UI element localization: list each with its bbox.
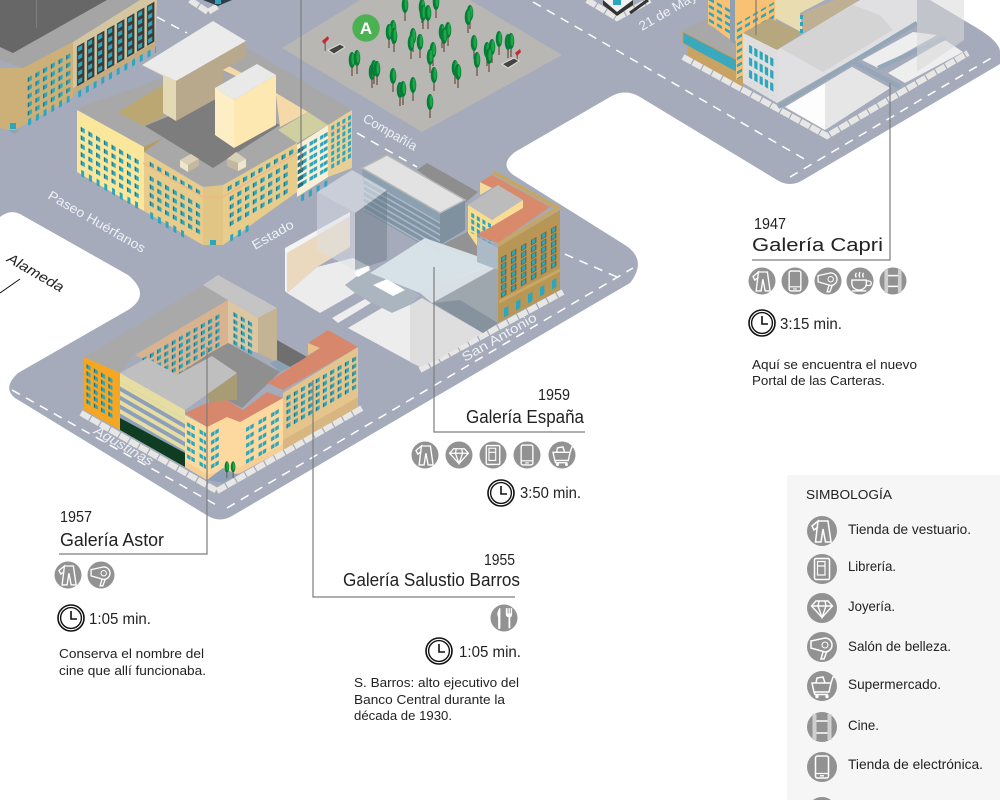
- translucent volume: [317, 170, 498, 333]
- trees: [349, 0, 514, 118]
- callout: Galería Astor: Galería Astor: [60, 529, 164, 550]
- callout: Galería Astor: Conserva el nombre del: [59, 646, 204, 661]
- building: Huérfanos block: [77, 21, 352, 245]
- metro marker A: [352, 14, 380, 42]
- beige windows: [800, 15, 803, 33]
- callout: Galería España: Galería España: [466, 406, 585, 427]
- callout: Galería Salustio Barros: Banco Central durante la: [354, 692, 506, 707]
- callout: Galería Astor: [54, 509, 206, 678]
- Alameda tick: [0, 279, 20, 293]
- building: Galería Astor block: [84, 275, 358, 483]
- callout: Galería Salustio Barros: [343, 552, 521, 723]
- panel: legend: Librería.: [848, 558, 896, 574]
- panel: legend: Cine.: [848, 717, 879, 733]
- road dashes: [12, 2, 993, 508]
- ground plan: [778, 23, 963, 130]
- panel: legend: Tienda de electrónica.: [848, 756, 983, 772]
- callout: Galería Capri: 3:15 min.: [780, 316, 842, 333]
- callout: Galería Capri: Aquí se encuentra el nuevo: [752, 357, 917, 372]
- street labels: Estado: [249, 217, 296, 253]
- corner plaza: [207, 468, 238, 483]
- street labels: San Antonio: [459, 310, 539, 365]
- brick corner building: [468, 172, 561, 323]
- tall block: [142, 21, 246, 121]
- legend heading: SIMBOLOGÍA: [806, 487, 892, 502]
- callout: Galería Capri: Portal de las Carteras.: [752, 373, 885, 388]
- sidewalks: [81, 0, 968, 491]
- panel: legend: Tienda de vestuario.: [848, 521, 971, 537]
- plaza with trees: [282, 0, 562, 132]
- callout: Galería Astor: 1957: [60, 509, 92, 526]
- grey office block: [362, 155, 465, 255]
- building top-left: [0, 0, 157, 134]
- callout: Galería Capri: 1947: [754, 216, 786, 233]
- building: Galería Capri block: [683, 0, 964, 130]
- building top-centre white: [603, 0, 633, 16]
- white-grey building: [743, 0, 917, 103]
- base plan: [285, 212, 483, 367]
- street labels: Compañía: [360, 111, 421, 154]
- street labels: [4, 0, 706, 469]
- callout: Galería Capri: [748, 216, 917, 388]
- metro marker A: A: [360, 19, 372, 38]
- street labels: Alameda: [4, 249, 67, 295]
- callout: Galería Salustio Barros: década de 1930.: [354, 708, 452, 723]
- callout: Galería Astor: 1:05 min.: [89, 611, 151, 628]
- yellow tower: [215, 64, 276, 148]
- metro entrance right: [502, 49, 521, 68]
- building small top centre: [203, 0, 232, 6]
- panel: legend: Salón de belleza.: [848, 638, 951, 654]
- callout: Galería Salustio Barros: 1:05 min.: [459, 644, 521, 661]
- panel: legend: Joyería.: [848, 598, 895, 614]
- rooftop units: [180, 152, 246, 172]
- callout: Galería España: 1959: [538, 387, 570, 404]
- panel: legend: [787, 475, 1000, 800]
- callout: Galería Salustio Barros: 1955: [484, 552, 515, 569]
- callout: Galería España: [412, 387, 585, 506]
- callout: Galería Salustio Barros: S. Barros: alto ejecutivo del: [354, 675, 519, 690]
- street labels: Agustinas: [90, 422, 157, 469]
- road network: [0, 0, 1000, 520]
- callout: Galería Salustio Barros: Galería Salustio Barros: [343, 569, 520, 590]
- panel: legend: Supermercado.: [848, 676, 941, 692]
- dark strip top: [630, 0, 648, 13]
- callout: Galería Capri: Galería Capri: [752, 234, 883, 255]
- metro entrance left: [322, 36, 345, 54]
- street labels: Paseo Huérfanos: [46, 188, 149, 256]
- leader lines: [36, 0, 890, 597]
- callout: Galería España: 3:50 min.: [520, 485, 581, 502]
- callout: Galería Astor: cine que allí funcionaba.: [59, 663, 206, 678]
- building: Galería España site: [285, 155, 561, 367]
